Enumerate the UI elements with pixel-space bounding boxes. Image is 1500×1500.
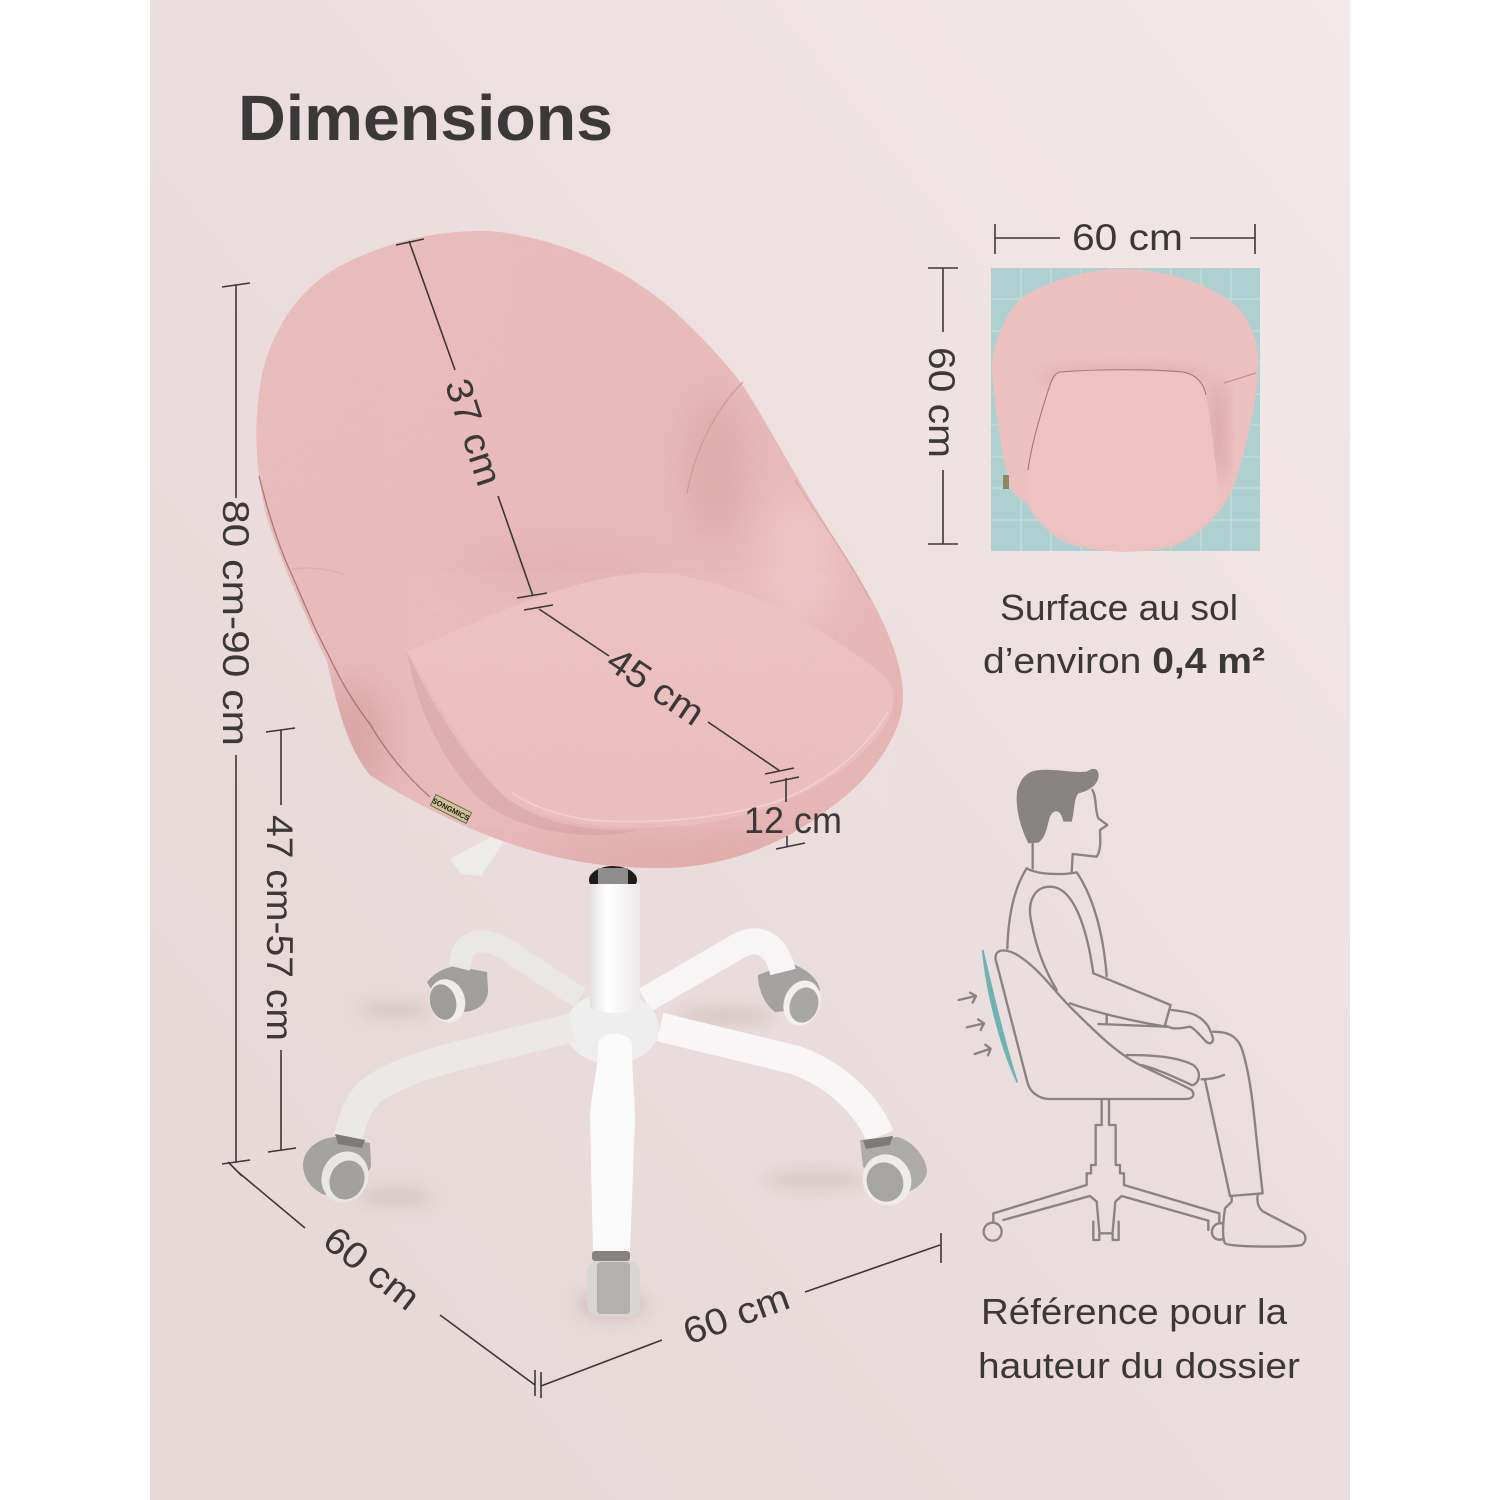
back legs: [459, 941, 783, 1000]
dimension: base width: [535, 1233, 941, 1398]
dimension: seat height: 47 cm-57 cm: [259, 815, 300, 1041]
infographic canvas: [150, 0, 1350, 1500]
outline figure: [984, 790, 1305, 1247]
hair: [1017, 769, 1099, 843]
caption: backrest reference: [978, 1291, 1300, 1386]
dimension: top view width: 60 cm: [1072, 217, 1183, 258]
dimension: seat depth: [524, 605, 794, 774]
pressure arrows: [959, 993, 991, 1055]
dimension: top view width: [995, 217, 1255, 258]
dimension: top view depth: 60 cm: [921, 347, 962, 458]
front casters: [303, 1134, 927, 1317]
top view panel: [985, 260, 1265, 555]
shell shading: [332, 406, 834, 868]
top view cushion edge: [1028, 370, 1206, 470]
background panel: [150, 0, 1350, 1500]
fabric texture: [348, 716, 737, 865]
dimension: seat thickness: [744, 777, 842, 849]
gas lift column: [589, 866, 640, 1013]
main chair photo: [250, 225, 927, 1321]
height lever: [450, 834, 505, 876]
top view seat cushion: [1027, 370, 1218, 552]
dimension: seat height: [259, 728, 300, 1152]
caption: backrest reference: hauteur du dossier: [978, 1345, 1300, 1386]
dimension: seat depth: 45 cm: [599, 639, 712, 734]
dimension: backrest height: 37 cm: [437, 374, 510, 491]
teal floor tiles: [991, 268, 1260, 551]
caption: floor area: d’environ 0,4 m²: [983, 640, 1265, 681]
top view seam: [1224, 373, 1256, 383]
lumbar support curve: [983, 950, 1017, 1082]
dimension: seat thickness: 12 cm: [744, 800, 842, 841]
cushion under-shadow: [407, 652, 640, 835]
hub: [565, 992, 659, 1064]
back casters: [424, 963, 827, 1031]
chair from above: [992, 269, 1258, 552]
caption: floor area: [983, 587, 1265, 681]
title: Dimensions: [238, 82, 613, 154]
brand label: SONGMICS: [431, 796, 471, 823]
dimension: top view depth: [921, 268, 962, 544]
dimension: base depth: 60 cm: [316, 1218, 428, 1318]
seated person diagram: [959, 769, 1305, 1247]
top view label tag: [1003, 475, 1009, 489]
cushion texture: [407, 573, 893, 828]
seat cushion: [407, 573, 893, 828]
caster shadows: [357, 1003, 865, 1321]
cushion stitching: [512, 712, 888, 822]
dimension: overall height: [215, 283, 256, 1164]
top view shading: [1051, 366, 1230, 474]
dimension: backrest height: [396, 239, 547, 598]
caption: floor area: Surface au sol: [1000, 587, 1238, 628]
front legs: [348, 1027, 880, 1252]
dimension: overall height: 80 cm-90 cm: [215, 500, 256, 746]
dimension: base width: 60 cm: [677, 1276, 795, 1353]
caption: backrest reference: Référence pour la: [981, 1291, 1288, 1332]
dimension: base depth: [228, 1162, 535, 1385]
seat shell: [256, 231, 903, 868]
shell seams: [259, 382, 870, 797]
